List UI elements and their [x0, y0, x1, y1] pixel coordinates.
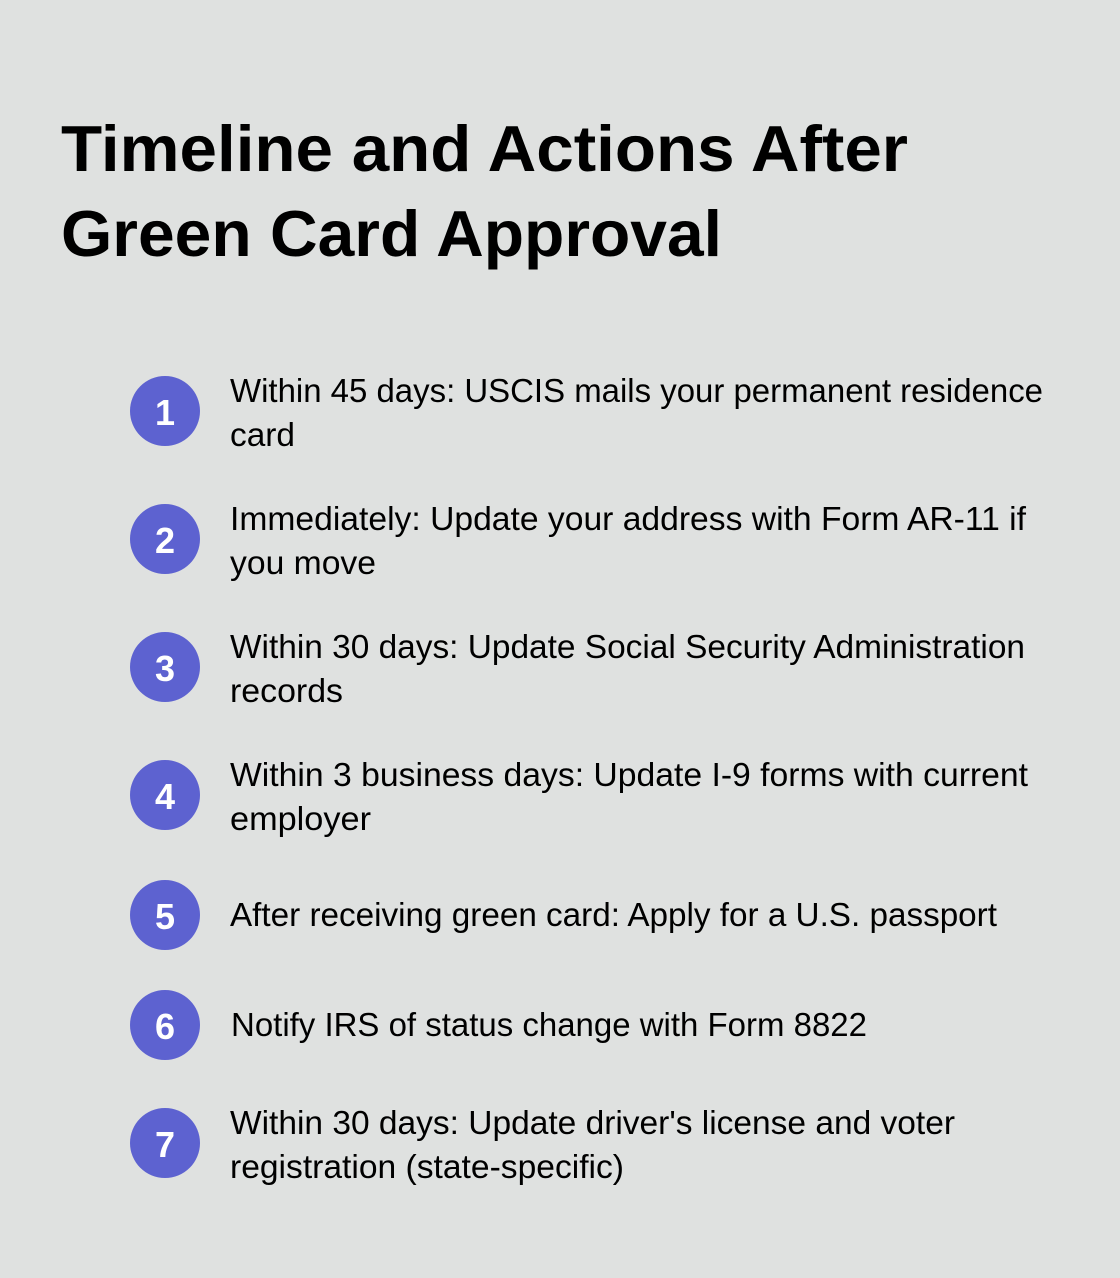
step 1 text: card — [230, 416, 295, 453]
number badge 3: 3 — [155, 648, 175, 689]
step 2 text: Immediately: Update your address with Form AR-11 if — [230, 500, 1027, 537]
number badge 5 — [130, 880, 200, 950]
step 5 text: After receiving green card: Apply for a U.S. passport — [230, 896, 997, 933]
number badge 6 — [130, 990, 200, 1060]
step 4 text: Within 3 business days: Update I-9 forms with current — [230, 756, 1028, 793]
number badge 4 — [130, 760, 200, 830]
number badge 7 — [130, 1108, 200, 1178]
number badge 4: 4 — [155, 776, 175, 817]
step 1 — [130, 372, 1043, 453]
step 2 — [130, 500, 1027, 581]
step 2 text — [230, 500, 1027, 581]
number badge 2: 2 — [155, 520, 175, 561]
number badge 1 — [130, 376, 200, 446]
step 7 text: Within 30 days: Update driver's license and voter — [230, 1104, 955, 1141]
step 2 text: you move — [230, 544, 376, 581]
number badge 7: 7 — [155, 1124, 175, 1165]
number badge 3 — [130, 632, 200, 702]
number badge 1: 1 — [155, 392, 175, 433]
step 3 — [130, 628, 1025, 709]
number badge 5: 5 — [155, 896, 175, 937]
step 3 text — [230, 628, 1025, 709]
step 4 text: employer — [230, 800, 371, 837]
step 7 — [130, 1104, 955, 1185]
step 4 — [130, 756, 1028, 837]
step 1 text — [230, 372, 1043, 453]
step 6 — [130, 990, 867, 1060]
step 1 text: Within 45 days: USCIS mails your permanent residence — [230, 372, 1043, 409]
step 7 text: registration (state-specific) — [230, 1148, 624, 1185]
number badge 6: 6 — [155, 1006, 175, 1047]
number badge 2 — [130, 504, 200, 574]
step 3 text: records — [230, 672, 343, 709]
step 3 text: Within 30 days: Update Social Security Administration — [230, 628, 1025, 665]
step 4 text — [230, 756, 1028, 837]
title — [61, 112, 908, 270]
step 5 — [130, 880, 997, 950]
title: Green Card Approval — [61, 197, 722, 270]
step 6 text: Notify IRS of status change with Form 8822 — [231, 1006, 867, 1043]
title: Timeline and Actions After — [61, 112, 908, 185]
step 7 text — [230, 1104, 955, 1185]
